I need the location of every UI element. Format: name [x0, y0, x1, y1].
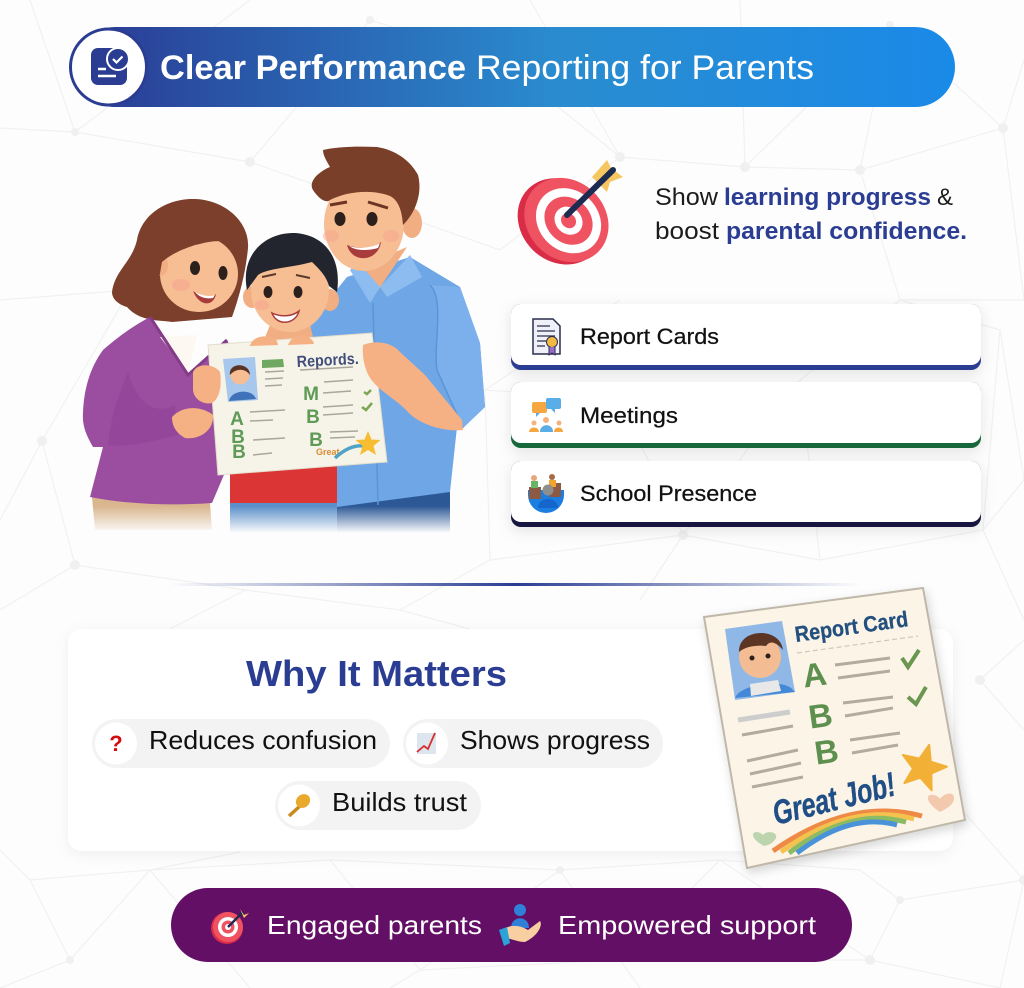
photo of child [725, 621, 795, 700]
icon: hand holding person [499, 904, 541, 946]
pill: builds trust: Builds trust [332, 787, 468, 817]
report sheet: B [306, 407, 320, 428]
pill: builds trust [275, 781, 481, 830]
illustration: report card: B [806, 696, 835, 736]
illustration: report card: B [812, 732, 841, 772]
title [160, 49, 814, 87]
icon: certificate document [533, 319, 560, 355]
illustration: report card: Great Job! [769, 766, 899, 833]
tagline: boost [655, 218, 719, 245]
icon: target with arrow [500, 158, 626, 284]
list card: meetings [511, 382, 981, 448]
report sheet: Great [316, 447, 340, 457]
list card: meetings: Meetings [580, 403, 678, 428]
illustration: report card: Report Card [793, 606, 910, 647]
footer banner: Engaged parents [267, 910, 482, 940]
footer banner [171, 888, 852, 962]
father [310, 147, 485, 540]
list card: school presence: School Presence [580, 481, 757, 506]
icon: school group [528, 474, 564, 513]
tagline: parental confidence. [726, 218, 967, 245]
report sheet: A [230, 409, 244, 430]
pill: reduces confusion [92, 719, 390, 768]
report sheet: M [303, 384, 319, 405]
list card: report cards [511, 304, 981, 370]
report sheet: Repords. [296, 351, 359, 371]
icon: meeting people [529, 398, 563, 432]
report sheet: B [232, 442, 246, 463]
tagline: learning progress [724, 184, 931, 211]
illustration: family holding report [75, 147, 485, 542]
pill: reduces confusion: Reduces confusion [149, 725, 377, 755]
report sheet [208, 333, 387, 475]
boy [230, 233, 339, 540]
tagline [655, 184, 967, 245]
title: Clear Performance [160, 49, 466, 87]
heading: Why It Matters [246, 653, 507, 694]
icon: report badge [70, 29, 146, 105]
report sheet: B [231, 427, 245, 448]
hands [172, 335, 463, 438]
title: Reporting for Parents [476, 49, 814, 87]
list card: school presence [511, 461, 981, 527]
tagline: Show [655, 184, 719, 211]
mother [83, 199, 248, 530]
illustration: report card [704, 588, 965, 868]
header banner [70, 27, 955, 107]
pill: reduces confusion: ? [109, 731, 123, 756]
tagline: & [937, 184, 953, 211]
panel: why it matters [68, 629, 953, 851]
list card: report cards: Report Cards [580, 324, 719, 349]
pill: shows progress [403, 719, 663, 768]
pill: shows progress: Shows progress [460, 725, 650, 755]
icon: target [211, 909, 249, 944]
report sheet: B [309, 430, 323, 451]
illustration: report card: A [800, 655, 829, 695]
footer banner: Empowered support [558, 910, 817, 940]
